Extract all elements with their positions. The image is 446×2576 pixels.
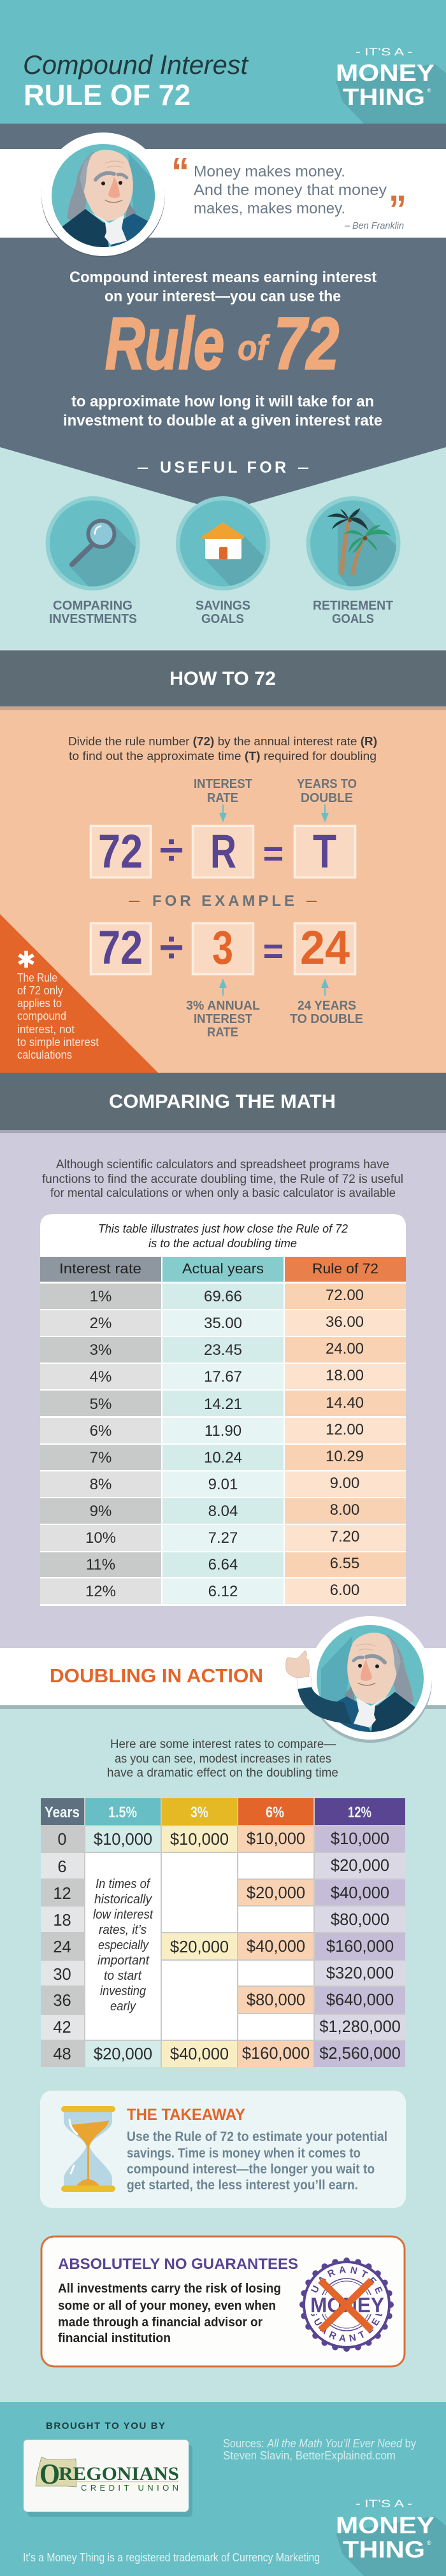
heading: for example: FOR EXAMPLE [152,892,294,910]
panel: absolutely no guarantees [41,2236,405,2367]
table note: low interest rates: historically [94,1893,152,1907]
table values: $10,000 [331,1830,389,1848]
table rows: 18.00 [326,1367,364,1384]
callout: compound interest note: of 72 only [17,984,63,997]
formula: 72 divided by 3 equals 24: ÷ [159,923,183,971]
table rows: 10.29 [326,1448,364,1465]
labels: useful for items: GOALS [201,612,244,626]
logo card: Oregonians Credit Union [24,2440,192,2517]
table rows: 14.21 [204,1396,242,1413]
labels: useful for items: COMPARING [53,599,133,613]
callout: compound interest note [0,914,158,1073]
heading band: how to 72 [0,650,446,706]
table values: $160,000 [326,1938,394,1956]
table note: low interest rates: In times of [96,1877,151,1891]
icon: magnifying glass [46,496,143,590]
quote text: And the money that money [194,182,387,199]
heading band: doubling in action [0,1648,446,1705]
text: takeaway body: savings. Time is money when it comes to [127,2146,361,2161]
table values: $40,000 [170,2045,229,2063]
logo: It's a Money Thing footer: THING [343,2537,425,2563]
table header row [41,1798,405,1825]
table card: comparing the math [40,1214,406,1606]
table rows: 10% [85,1529,116,1547]
text: how to instructions: to find out the approximate time (T) required for doubling [69,749,377,762]
table years column: 48 [53,2045,71,2063]
logo card: Oregonians Credit Union: CREDIT UNION [81,2483,178,2493]
table note: low interest rates: especially [98,1938,149,1952]
text: comparing intro: functions to find the accurate doubling time, the Rule of 72 is useful [42,1173,403,1186]
heading band: how to 72: HOW TO 72 [169,668,276,689]
table values: $20,000 [170,1938,229,1956]
panel: footer [0,2402,446,2576]
table header row: 1.5% [108,1804,137,1821]
text: comparing intro [42,1158,403,1200]
table values: $80,000 [247,1991,305,2009]
label: brought to you by: BROUGHT TO YOU BY [46,2421,165,2431]
heading: Rule of 72: Rule [105,303,224,385]
table rows: 4% [90,1368,112,1385]
logo: It's a Money Thing: - IT’S A - [356,46,412,58]
labels: example values: RATE [207,1026,238,1040]
table rows: 11% [86,1556,115,1573]
heading band: comparing the math: COMPARING THE MATH [109,1091,336,1112]
labels: interest rate and years to double: RATE [207,791,238,805]
text: doubling intro: as you can see, modest increases in rates [115,1752,331,1766]
icon: house [176,496,274,590]
text: takeaway body: Use the Rule of 72 to estimate your potential [127,2129,387,2144]
table rows: 5% [90,1396,112,1413]
table header: Actual years [182,1261,264,1277]
table header [40,1257,406,1282]
panel: doubling in action background [0,1705,446,2402]
icon: crossed out guaranteed stamp: GUARANTEED [311,2314,382,2342]
labels: example values: 24 YEARS [298,999,356,1013]
text: guarantees body: financial institution [58,2331,171,2345]
heading: Rule of 72: 72 [274,303,339,385]
table note: low interest rates: low interest [93,1908,154,1922]
panel: quote band [0,132,446,257]
text: guarantees body: All investments carry the risk of losing [58,2281,281,2296]
logo: It's a Money Thing footer: ® [427,2540,431,2546]
table rows: 9.01 [208,1476,238,1493]
logo: It's a Money Thing: MONEY [336,60,435,86]
intro text [69,269,377,305]
table rows [40,1284,406,1604]
table rows: 6.55 [330,1555,359,1572]
quote text: makes, makes money. [194,200,345,217]
table values: $640,000 [326,1991,394,2009]
callout: compound interest note: calculations [17,1048,72,1061]
panel: header [0,0,446,124]
table years column: 42 [53,2019,71,2036]
text: takeaway body: get started, the less interest you’ll earn. [127,2178,358,2193]
table rows: 8% [90,1476,112,1493]
intro text: Compound interest means earning interest [69,269,377,286]
table rows: 72.00 [326,1287,364,1304]
text: how to instructions [68,734,377,762]
text: sources [223,2437,416,2462]
callout: compound interest note: to simple interest [17,1036,99,1048]
logo card: Oregonians Credit Union: O [40,2458,60,2490]
table caption: This table illustrates just how close the Rule of 72 [98,1222,349,1235]
panel: the takeaway [40,2091,406,2208]
arrow: up to 3 [219,978,227,996]
icon: crossed out guaranteed stamp: GUARANTEED [308,2266,383,2302]
formula: 72 divided by 3 equals 24: 3 [212,921,233,974]
labels: useful for items [49,599,393,626]
heading: the takeaway: THE TAKEAWAY [127,2106,245,2124]
icon: palm trees [306,496,400,590]
text: guarantees body: made through a financial advisor or [58,2315,263,2329]
table years column [53,1831,71,2063]
table values: $1,280,000 [319,2018,401,2036]
heading band: comparing the math [0,1073,446,1130]
table header row: 12% [348,1804,371,1821]
table rows: 12% [85,1583,116,1600]
labels: useful for items: INVESTMENTS [49,612,137,626]
table cell backgrounds [41,1826,405,2067]
labels: useful for items: GOALS [332,612,374,626]
table rows: 10.24 [204,1449,242,1466]
table header: Interest rate [59,1261,141,1277]
text: sources: Steven Slavin, BetterExplained.com [223,2449,396,2462]
table note: low interest rates: to start [104,1969,142,1983]
table rows: 69.66 [204,1288,242,1305]
logo: It's a Money Thing: ® [427,87,431,94]
logo: It's a Money Thing: THING [343,84,425,110]
panel: slate intro with chevron [0,124,446,650]
formula: 72 divided by R equals T: R [210,825,236,878]
title: Rule of 72: RULE OF 72 [24,78,191,111]
formula: 72 divided by 3 equals 24: 72 [98,921,143,974]
labels: example values: 3% ANNUAL [186,999,260,1013]
icon: closing quote: ” [389,188,406,232]
formula: 72 divided by R equals T [90,825,356,878]
table rows: 6.00 [330,1582,359,1599]
text: doubling intro: have a dramatic effect on the doubling time [107,1766,338,1780]
table header row: Years [45,1804,80,1821]
table rows: 24.00 [326,1340,364,1357]
table header row: 3% [191,1804,208,1821]
text: guarantees body: some or all of your money, even when [58,2298,276,2313]
table rows: 1% [90,1288,112,1305]
labels: interest rate and years to double: INTEREST [194,777,252,791]
portrait: Ben Franklin [41,132,165,257]
explanation text: investment to double at a given interest rate [63,412,382,429]
table values: $160,000 [242,2045,310,2063]
table: doubling by rate [41,1798,405,2067]
formula: 72 divided by 3 equals 24 [90,921,356,975]
table rows: 7.27 [208,1529,238,1547]
labels: example values: INTEREST [194,1012,252,1026]
logo: It's a Money Thing footer: - IT’S A - [356,2498,412,2510]
text: comparing intro: for mental calculations or when only a basic calculator is available [50,1187,396,1200]
table rows: 6% [90,1422,112,1440]
table note: low interest rates: important [97,1954,150,1968]
text: trademark: It’s a Money Thing is a registered trademark of Currency Marketing [23,2551,320,2564]
callout: compound interest note: interest, not [17,1023,75,1036]
table values: $320,000 [326,1964,394,1982]
table note: low interest rates [93,1877,154,2014]
table caption: is to the actual doubling time [148,1236,297,1250]
quote text: Money makes money. [194,163,345,180]
text: how to instructions: Divide the rule number (72) by the annual interest rate (R) [68,734,377,748]
table values: $20,000 [94,2045,152,2063]
icon: opening quote: “ [171,150,189,194]
table years column: 18 [53,1912,71,1929]
icon: crossed out guaranteed stamp [299,2258,394,2352]
table rows: 9% [90,1503,112,1520]
callout: compound interest note: ✱ [17,947,36,973]
table rows: 3% [90,1342,112,1359]
callout: compound interest note: applies to [17,997,62,1010]
table header: Rule of 72 [312,1261,378,1277]
table caption [98,1222,349,1250]
table years column: 12 [53,1885,71,1903]
logo: It's a Money Thing footer: MONEY [336,2512,435,2538]
text: comparing intro: Although scientific calculators and spreadsheet programs have [56,1158,389,1171]
intro text: on your interest—you can use the [104,288,341,305]
table rows: 7.20 [330,1528,359,1545]
logo card: Oregonians Credit Union: REGONIANS [59,2463,179,2484]
icon: crossed out guaranteed stamp: MONEY [310,2293,384,2317]
text: takeaway body [127,2129,387,2193]
formula: 72 divided by 3 equals 24: = [263,931,284,971]
title: Compound Interest: Compound Interest [23,50,249,80]
callout: compound interest note: compound [17,1010,66,1022]
text: sources: Sources: All the Math You’ll Ever Need by [223,2437,416,2450]
table values: $20,000 [331,1857,389,1875]
arrow: down to T [321,805,329,822]
table rows: 35.00 [204,1315,242,1332]
panel: how to 72 background [0,706,446,1073]
table note: low interest rates: rates, it’s [99,1923,147,1937]
table note: low interest rates: investing [100,1984,146,1998]
formula: 72 divided by R equals T: = [263,833,284,873]
table years column: 0 [57,1831,67,1849]
heading: useful for: USEFUL FOR [160,459,286,476]
labels: useful for items: SAVINGS [196,599,250,613]
quote attribution: – Ben Franklin [344,220,404,231]
table years column: 36 [53,1992,71,2010]
heading band: doubling in action: DOUBLING IN ACTION [50,1664,263,1687]
labels: interest rate and years to double: DOUBLE [301,791,353,805]
heading: Rule of 72: of [238,327,271,368]
table rows: 7% [90,1449,112,1466]
table values [94,1830,401,2063]
table rows: 12.00 [326,1421,364,1438]
table values: $10,000 [170,1831,229,1849]
table values: $80,000 [331,1911,389,1929]
formula: 72 divided by R equals T: 72 [98,825,143,878]
formula: 72 divided by 3 equals 24: 24 [300,921,350,974]
table years column: 6 [57,1858,67,1876]
table rows: 23.45 [204,1342,242,1359]
labels: example values [186,999,363,1040]
table values: $40,000 [331,1884,389,1902]
table header row: 6% [266,1804,284,1821]
table rows: 14.40 [326,1394,364,1412]
table values: $10,000 [94,1831,152,1849]
quote text [194,163,387,217]
heading: Rule of 72 [105,303,339,385]
labels: interest rate and years to double: YEARS TO [297,777,357,791]
labels: example values: TO DOUBLE [290,1012,363,1026]
text: guarantees body [58,2281,281,2345]
logo: It's a Money Thing [336,46,446,124]
table values: $20,000 [247,1884,305,1902]
table years column: 30 [53,1966,71,1984]
table values: $40,000 [247,1938,305,1956]
icon: hourglass [61,2106,115,2192]
table years column: 24 [53,1938,71,1956]
heading: no guarantees: ABSOLUTELY NO GUARANTEES [58,2256,298,2273]
formula: 72 divided by R equals T: T [313,825,336,878]
table values: $10,000 [247,1830,305,1848]
table values: $2,560,000 [319,2045,401,2063]
explanation text [63,393,382,429]
text: doubling intro: Here are some interest rates to compare— [110,1738,336,1751]
table note: low interest rates: early [110,2000,136,2014]
table rows: 9.00 [330,1475,359,1492]
labels: interest rate and years to double [194,777,357,805]
table rows: 6.64 [208,1556,238,1573]
text: takeaway body: compound interest—the longer you wait to [127,2162,375,2177]
table rows: 36.00 [326,1313,364,1331]
table rows: 8.04 [208,1503,238,1520]
callout: compound interest note: The Rule [17,971,57,984]
panel: comparing background [0,1130,446,1648]
table rows: 2% [90,1315,112,1332]
table rows: 6.12 [208,1583,238,1600]
table rows: 11.90 [205,1422,241,1440]
text: doubling intro [107,1738,338,1780]
table rows: 17.67 [204,1368,242,1385]
logo: It's a Money Thing footer [336,2498,446,2576]
explanation text: to approximate how long it will take for an [71,393,374,410]
arrow: up to 24 [321,978,329,996]
labels: useful for items: RETIREMENT [313,599,393,613]
formula: 72 divided by R equals T: ÷ [159,826,183,874]
arrow: down to R [219,805,227,822]
portrait: Ben Franklin thumbs up [286,1616,432,1743]
table rows: 8.00 [330,1501,359,1519]
